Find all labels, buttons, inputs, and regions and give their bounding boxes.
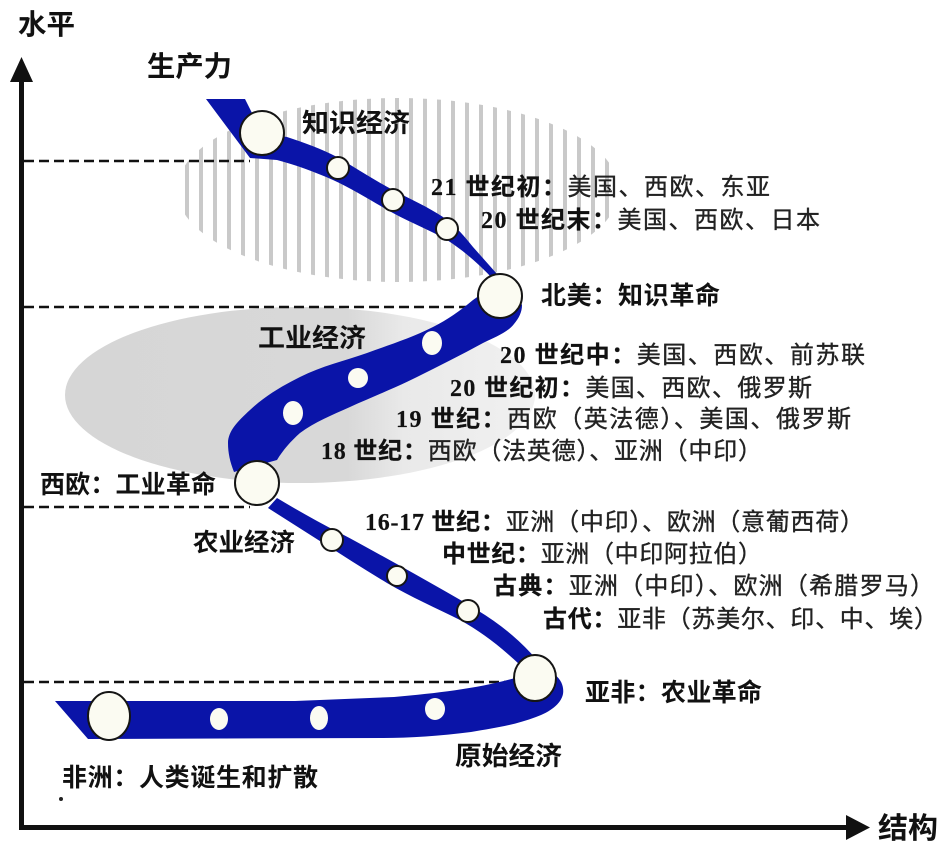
horizontal axis with arrow	[19, 815, 870, 840]
curve title: 生产力	[147, 51, 232, 82]
milestone nodes: primitive economy	[88, 655, 556, 740]
hatched ellipse: knowledge economy zone	[177, 98, 619, 282]
dashed level lines	[24, 161, 520, 682]
ribbon: industrial economy segment	[228, 288, 522, 472]
stage label: industrial economy: 工业经济	[258, 323, 366, 353]
x axis title: 结构	[878, 812, 938, 845]
small mark	[59, 797, 63, 801]
timeline: early 20th century: 20 世纪初：美国、西欧、俄罗斯	[450, 375, 812, 402]
timeline: medieval: 中世纪：亚洲（中印阿拉伯）	[442, 541, 762, 568]
timeline: classical: 古典：亚洲（中印）、欧洲（希腊罗马）	[493, 573, 934, 600]
timeline: late 20th century: 20 世纪末：美国、西欧、日本	[481, 207, 820, 234]
timeline: ancient: 古代：亚非（苏美尔、印、中、埃）	[543, 606, 938, 633]
timeline: 16th to 17th century: 16-17 世纪：亚洲（中印）、欧洲（意葡西荷）	[365, 509, 864, 536]
timeline: 18th century: 18 世纪：西欧（法英德）、亚洲（中印）	[321, 438, 762, 465]
ribbon: primitive economy segment	[55, 675, 563, 739]
stage label: agricultural economy: 农业经济	[193, 529, 295, 557]
milestone nodes: knowledge economy	[240, 111, 458, 240]
origin label: Africa: 非洲：人类诞生和扩散	[62, 764, 318, 792]
revolution label: Western Europe: 西欧：工业革命	[40, 470, 216, 499]
timeline: early 21st century: 21 世纪初：美国、西欧、东亚	[431, 174, 770, 201]
revolution label: Asia and Africa: 亚非：农业革命	[585, 678, 762, 707]
gray ellipse: industrial economy zone	[65, 307, 535, 483]
timeline: 19th century: 19 世纪：西欧（英法德）、美国、俄罗斯	[396, 406, 851, 433]
y axis title: 水平	[18, 9, 75, 40]
stage label: knowledge economy: 知识经济	[302, 108, 410, 138]
ribbon: agricultural economy segment	[268, 498, 537, 665]
stage label: primitive economy: 原始经济	[455, 741, 562, 771]
milestone nodes: agricultural economy	[235, 461, 479, 622]
ribbon: knowledge economy segment	[206, 99, 497, 279]
timeline: mid 20th century: 20 世纪中：美国、西欧、前苏联	[500, 342, 865, 369]
vertical axis with arrow	[10, 57, 33, 830]
milestone nodes: industrial economy	[283, 274, 522, 425]
revolution label: North America: 北美：知识革命	[541, 281, 720, 310]
